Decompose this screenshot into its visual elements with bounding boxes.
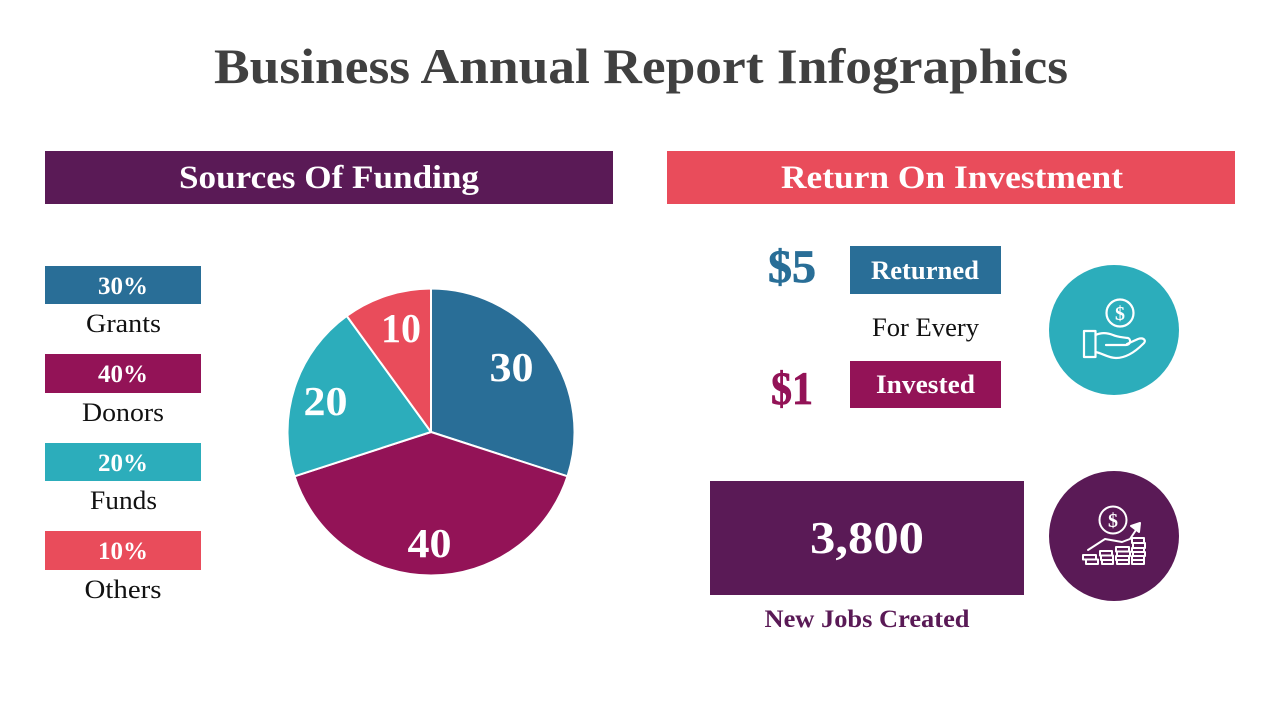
legend: donors bbox=[45, 354, 201, 427]
heading: sources of funding: Sources Of Funding bbox=[179, 160, 480, 196]
text: for every: For Every bbox=[872, 313, 979, 342]
stat: $5 returned bbox=[768, 241, 1001, 294]
legend: others bbox=[45, 531, 201, 604]
legend: others: Others bbox=[84, 575, 162, 604]
pie chart bbox=[288, 288, 575, 576]
heading: sources of funding bbox=[45, 151, 613, 204]
stat: $5 returned: Returned bbox=[871, 256, 980, 285]
legend: grants: Grants bbox=[86, 309, 161, 338]
heading: return on investment: Return On Investment bbox=[781, 160, 1123, 196]
pie chart: 20 bbox=[304, 378, 348, 424]
stat: new jobs created bbox=[710, 481, 1024, 633]
panel: return on investment bbox=[667, 151, 1235, 633]
heading: return on investment bbox=[667, 151, 1235, 204]
legend: funds: Funds bbox=[90, 486, 157, 515]
stat: $1 invested: $1 bbox=[771, 363, 813, 415]
icon: growth chart with coin bbox=[1049, 471, 1179, 601]
icon: hand holding coin: $ bbox=[1115, 303, 1125, 325]
stat: new jobs created: New Jobs Created bbox=[764, 606, 970, 633]
legend: grants: 30% bbox=[98, 273, 148, 300]
stat: $1 invested bbox=[771, 361, 1001, 415]
title: Business Annual Report Infographics bbox=[214, 38, 1068, 94]
legend: funds bbox=[45, 443, 201, 515]
stat: $5 returned: $5 bbox=[768, 241, 816, 293]
legend: grants bbox=[45, 266, 201, 338]
icon: growth chart with coin: $ bbox=[1108, 510, 1118, 532]
legend: donors: Donors bbox=[82, 398, 164, 427]
icon: hand holding coin bbox=[1049, 265, 1179, 395]
stat: new jobs created: 3,800 bbox=[810, 513, 924, 563]
legend: donors: 40% bbox=[98, 361, 148, 388]
pie chart: 30 bbox=[490, 344, 534, 390]
legend: funds: 20% bbox=[98, 450, 148, 477]
stat: $1 invested: Invested bbox=[876, 370, 976, 399]
legend: others: 10% bbox=[98, 538, 148, 565]
panel: sources of funding bbox=[45, 151, 613, 604]
pie chart: 10 bbox=[381, 305, 421, 351]
pie chart: 40 bbox=[408, 520, 452, 566]
